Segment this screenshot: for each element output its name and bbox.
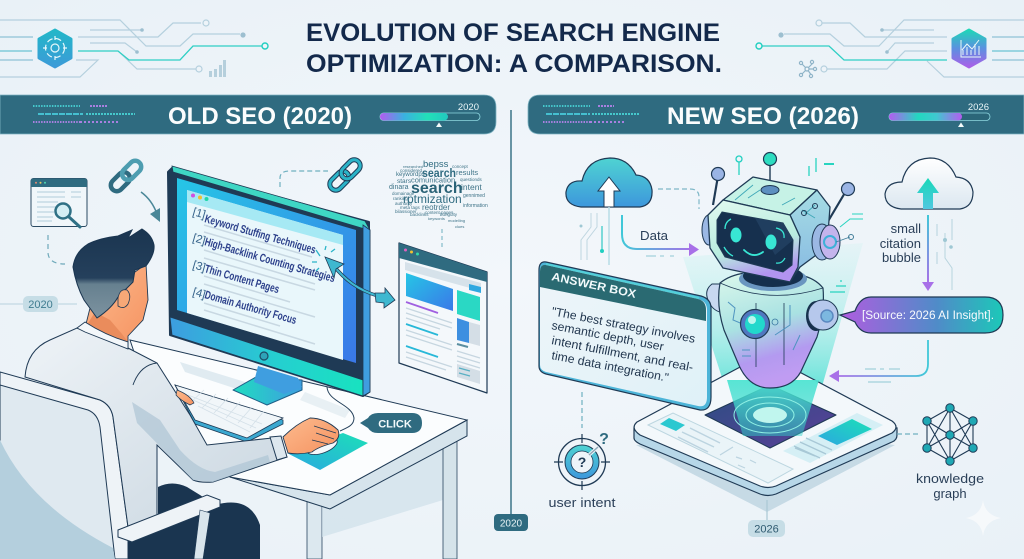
- banner: old SEO: [0, 95, 496, 134]
- word cloud: results: [456, 168, 478, 177]
- far hand: [176, 390, 194, 405]
- icon: target hexagon: [39, 30, 71, 67]
- label: 2026 tag: 2026: [754, 524, 779, 536]
- list item: thin content: [3]: [191, 259, 207, 274]
- robot shoulder: [806, 300, 838, 331]
- arrow: return to robot: [829, 340, 928, 382]
- ear: [118, 290, 130, 308]
- word cloud: considered: [400, 168, 423, 173]
- platform right panel: [783, 413, 883, 463]
- word cloud: [389, 159, 488, 229]
- label: data: Data: [640, 229, 668, 243]
- neck and face: [85, 264, 148, 348]
- dashed connector: answer box to user intent: [581, 392, 583, 428]
- citation bubble: [Source: 2026 AI Insight].: [862, 310, 994, 322]
- answer box quote: semantic depth, user: [550, 318, 665, 354]
- list item: domain authority: Domain Authority Focus: [203, 289, 298, 327]
- circuit decoration: left: [0, 20, 268, 77]
- word cloud: comunication: [411, 176, 455, 184]
- word cloud: stars: [397, 178, 412, 185]
- antennas: [712, 152, 863, 227]
- robot ear: [812, 224, 854, 260]
- mouse cable: [327, 387, 354, 431]
- head: [702, 177, 854, 282]
- answer box quote: "The best strategy involves: [550, 304, 696, 346]
- arrow: data: [622, 215, 699, 256]
- center timeline divider: 2020: [500, 518, 523, 530]
- word cloud: gennimed: [463, 193, 485, 199]
- legs: [128, 484, 260, 559]
- timeline progress bar 2020: 2020: [458, 102, 479, 113]
- desk: [130, 340, 467, 559]
- robot: [702, 152, 863, 388]
- holographic well: [705, 385, 836, 448]
- decorative robot sparks: [830, 281, 846, 292]
- icon: browser with magnifier: [31, 178, 87, 227]
- icon: chart hexagon: [953, 30, 985, 67]
- word cloud: search: [411, 180, 463, 197]
- label: user intent: user intent: [548, 495, 616, 510]
- list item: backlink counting: [2]: [191, 232, 207, 247]
- title: EVOLUTION OF SEARCH ENGINE: [306, 19, 720, 47]
- answer box quote: [550, 304, 696, 385]
- collar: [77, 322, 128, 349]
- timeline progress bar 2020: [380, 102, 480, 127]
- armrest: [118, 495, 220, 542]
- answer box: [539, 262, 711, 410]
- label: small citation bubble: bubble: [882, 250, 921, 265]
- icon: white upload cloud: [885, 158, 973, 209]
- icon: user intent target: ?: [599, 431, 609, 448]
- icon: sparkle: [966, 500, 1001, 536]
- keyboard: [175, 385, 283, 442]
- label: small citation bubble: [880, 221, 921, 265]
- projected light rings: [727, 380, 819, 436]
- circuit decoration: right: [756, 20, 1024, 78]
- cuff: [270, 436, 287, 460]
- word cloud: bilassioner: [395, 209, 417, 214]
- word cloud: researched: [403, 164, 423, 169]
- word cloud: content pages: [425, 210, 454, 215]
- platform left panel: [648, 413, 793, 483]
- word cloud: ranking: [393, 196, 408, 201]
- word cloud: backlinks: [410, 212, 429, 217]
- word cloud: domainage: [392, 191, 415, 196]
- center timeline divider: [494, 110, 528, 531]
- list item: domain authority: [191, 286, 298, 327]
- word cloud: keywords: [428, 216, 445, 221]
- monitor stand: [233, 366, 302, 405]
- label: 2020 tag: 2020: [28, 299, 53, 311]
- dashed connector: monitor to chain: [280, 171, 328, 187]
- word cloud: modelling: [448, 218, 465, 223]
- label: 2026 tag: [748, 500, 785, 537]
- arrow: link to monitor: [141, 192, 160, 222]
- beam of light: [683, 243, 863, 418]
- screen placeholder lines: [204, 225, 315, 344]
- hair: [73, 229, 154, 318]
- word cloud: dinara: [389, 184, 409, 191]
- dashed connector: platform to graph: [897, 433, 918, 435]
- callout: click: [360, 413, 422, 433]
- timeline progress bar 2026: [889, 102, 990, 127]
- word cloud: meta tags: [400, 205, 421, 210]
- mouse: [305, 434, 339, 458]
- icon: chain link center: [327, 157, 363, 193]
- icon: user intent target: ?: [578, 454, 586, 470]
- word cloud: clues: [455, 224, 464, 229]
- word cloud: information: [463, 203, 488, 209]
- icon: upload cloud blue: [566, 158, 652, 265]
- monitor: [168, 166, 370, 396]
- icon: chain link left: [108, 158, 144, 194]
- word cloud: search: [422, 166, 456, 180]
- shirt torso: [25, 328, 287, 527]
- word cloud: concept: [452, 164, 469, 169]
- list item: keyword stuffing: [1]: [191, 206, 207, 221]
- icon: mouse pad: [287, 433, 368, 470]
- word cloud: questionds: [460, 177, 483, 182]
- list item: thin content: Thin Content Pages: [203, 263, 280, 296]
- browser page panel: [399, 243, 487, 393]
- word cloud: reotrder: [422, 203, 450, 212]
- label: knowledge graph: graph: [933, 486, 967, 501]
- robot face: [724, 219, 785, 263]
- title: [306, 19, 722, 78]
- list item: domain authority: [4]: [191, 286, 207, 301]
- dashed connector: browser to person: [48, 235, 65, 264]
- chair: [0, 372, 128, 559]
- citation bubble: [840, 297, 1003, 333]
- platform: [634, 356, 897, 512]
- robot body: [707, 273, 823, 388]
- word cloud: keywordps: [396, 172, 425, 178]
- label: 2020 tag: [0, 296, 77, 312]
- heading: old SEO: OLD SEO (2020): [168, 103, 352, 130]
- word cloud: authority: [395, 201, 413, 206]
- banner: new SEO: [528, 95, 1024, 134]
- person: [25, 229, 339, 559]
- dashed connector: cloud to robot: [658, 189, 699, 209]
- heading: new SEO: NEW SEO (2026): [667, 103, 859, 130]
- timeline progress bar 2026: 2026: [968, 102, 989, 113]
- word cloud: bunguity: [440, 212, 458, 217]
- icon: user intent target: [554, 431, 610, 490]
- list item: backlink counting: High-Backlink Counting Strategies: [203, 236, 336, 285]
- label: knowledge graph: knowledge: [916, 471, 984, 486]
- arrow: citation flow: [922, 215, 953, 291]
- answer box quote: intent fulfillment, and real-: [550, 333, 694, 374]
- callout: click: CLICK: [378, 418, 412, 430]
- word cloud: rptmization: [403, 192, 462, 206]
- word cloud: intent: [461, 182, 482, 192]
- label: knowledge graph: [916, 471, 984, 501]
- list item: thin content: [191, 259, 280, 296]
- robot neck: [739, 267, 807, 291]
- hand: [283, 418, 339, 454]
- title: OPTIMIZATION: A COMPARISON.: [306, 50, 722, 78]
- list item: backlink counting: [191, 232, 336, 285]
- icon: cursor with arrows: [312, 246, 395, 308]
- icon: knowledge graph: [923, 404, 977, 465]
- answer box quote: time data integration.": [550, 348, 670, 385]
- word cloud: bepss: [423, 159, 449, 170]
- chest core: [740, 310, 770, 338]
- dashed connector: cloud to page: [441, 229, 443, 250]
- label: small citation bubble: citation: [880, 236, 921, 251]
- answer box heading: ANSWER BOX: [550, 271, 637, 301]
- label: small citation bubble: small: [891, 221, 921, 236]
- list item: keyword stuffing: [191, 206, 317, 257]
- list item: keyword stuffing: Keyword Stuffing Techniques: [203, 213, 317, 257]
